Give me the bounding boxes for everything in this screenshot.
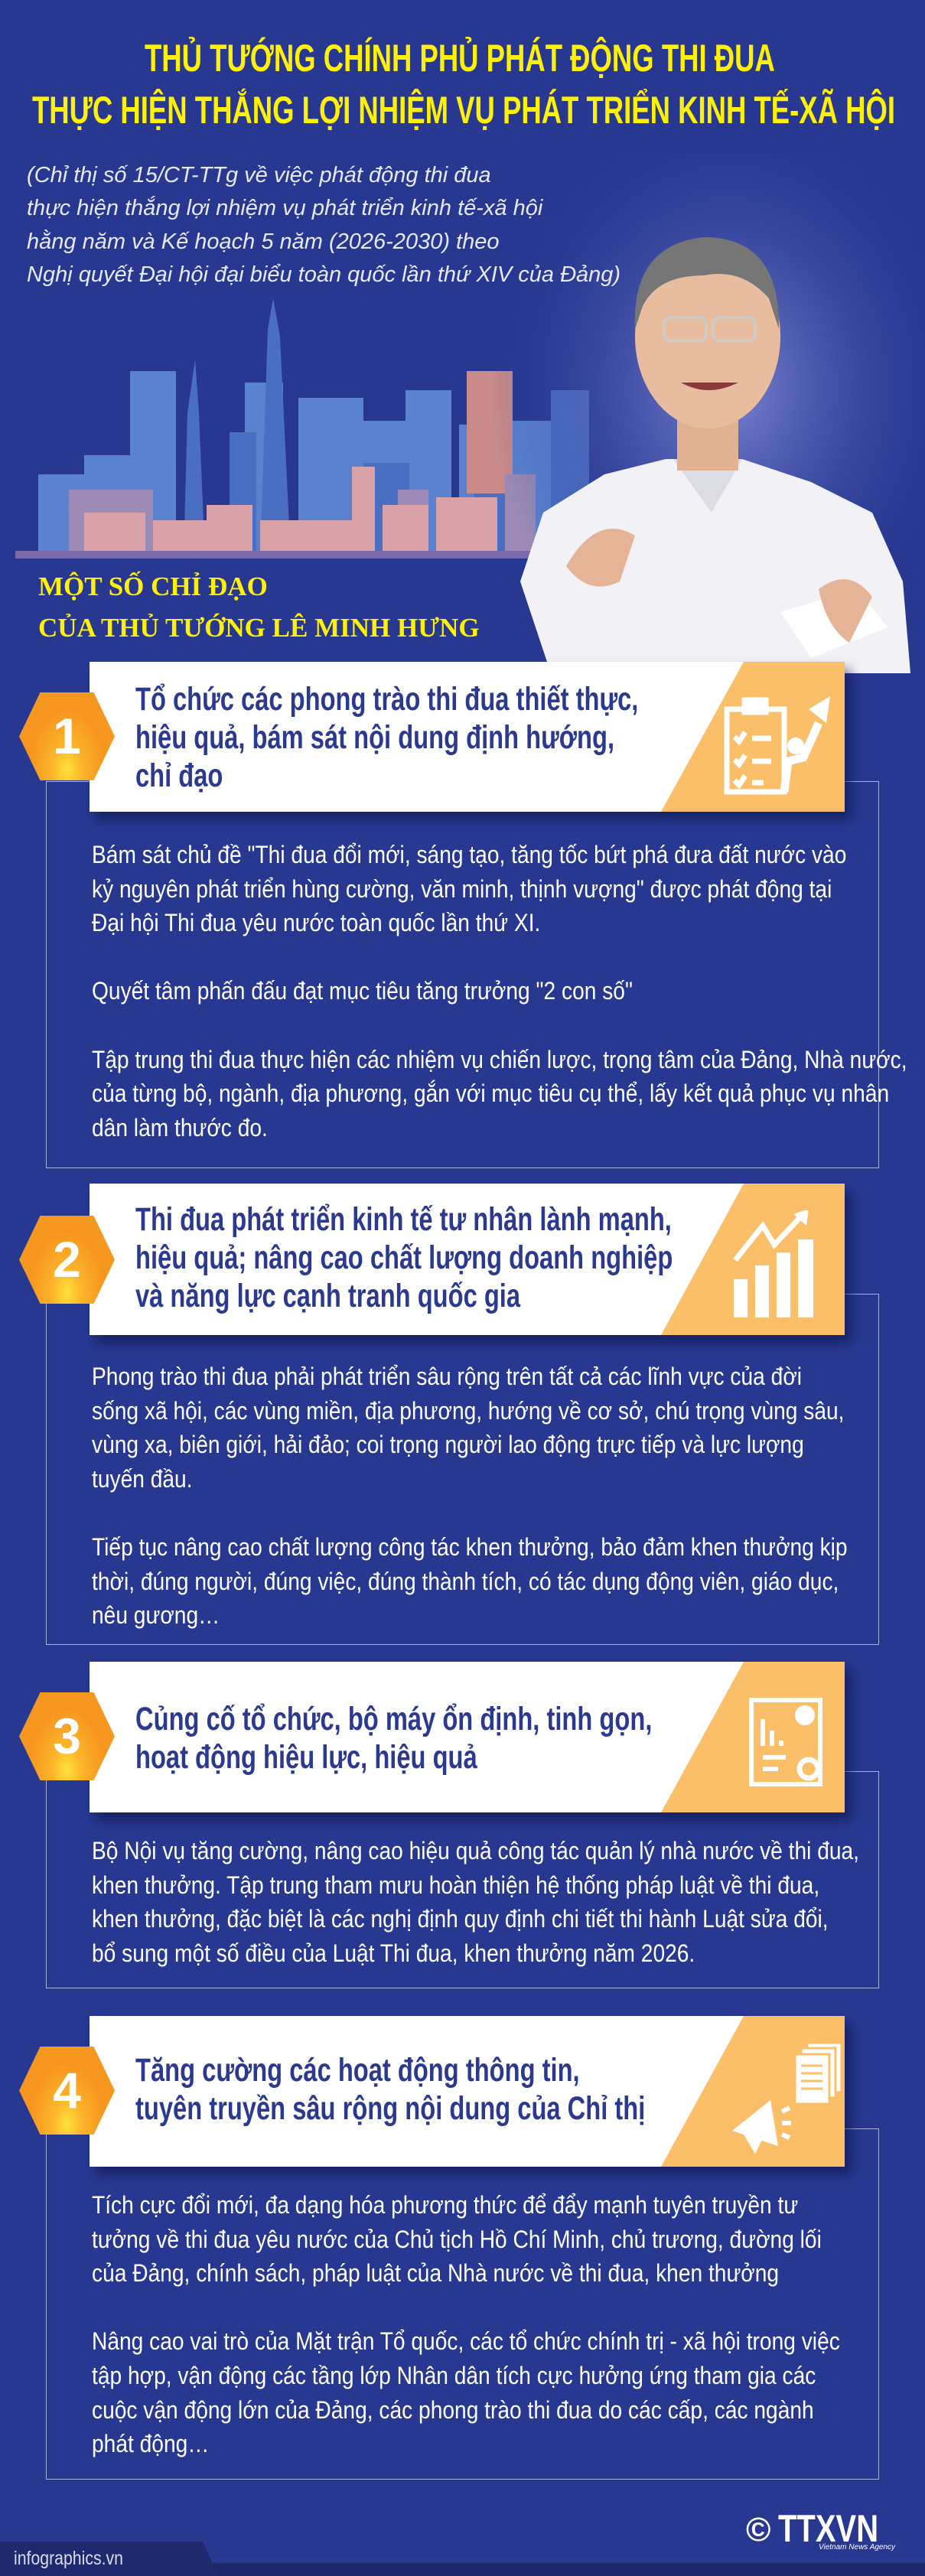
panel 1 header card (90, 662, 845, 812)
subtitle (27, 163, 620, 287)
subtitle: Nghị quyết Đại hội đại biểu toàn quốc lần thứ XIV của Đảng) (27, 262, 620, 287)
lead heading: CỦA THỦ TƯỚNG LÊ MINH HƯNG (38, 613, 480, 643)
icon: clipboard with arrow (724, 696, 830, 794)
title (32, 37, 895, 132)
hexagon badge 2 (19, 1216, 115, 1304)
panel 4 frame (46, 2128, 879, 2480)
panel 2 body text: thời, đúng người, đúng việc, đúng thành tích, có tác dụng động viên, giáo dục, (92, 1568, 839, 1595)
panel 1 body text: kỷ nguyên phát triển hùng cường, văn minh, thịnh vượng" được phát động tại (92, 875, 832, 903)
title: THỦ TƯỚNG CHÍNH PHỦ PHÁT ĐỘNG THI ĐUA (145, 37, 775, 80)
panel 4 body text: phát động… (92, 2430, 209, 2457)
icon: megaphone and documents (732, 2044, 840, 2154)
panel 2 heading: hiệu quả; nâng cao chất lượng doanh nghiệp (135, 1239, 673, 1276)
footer (0, 2542, 925, 2576)
panel 1 heading: Tổ chức các phong trào thi đua thiết thực, (135, 681, 638, 718)
panel 2 frame (46, 1294, 879, 1645)
illustration: portrait (502, 189, 910, 673)
panel 4 body text: tưởng về thi đua yêu nước của Chủ tịch Hồ Chí Minh, chủ trương, đường lối (92, 2226, 822, 2253)
panel 4 heading: tuyên truyền sâu rộng nội dung của Chỉ thị (135, 2090, 645, 2127)
icon: report with gear (749, 1698, 822, 1786)
panel 4 heading: Tăng cường các hoạt động thông tin, (135, 2052, 580, 2089)
panel 3 frame (46, 1771, 879, 1988)
panel 3 heading: hoạt động hiệu lực, hiệu quả (135, 1739, 477, 1776)
panel 4 body text: cuộc vận động lớn của Đảng, các phong trào thi đua do các cấp, các ngành (92, 2396, 814, 2424)
panel 1 heading (135, 681, 638, 794)
panel 4 body text: của Đảng, chính sách, pháp luật của Nhà nước về thi đua, khen thưởng (92, 2259, 779, 2287)
logo: TTXVN: TTXVN (778, 2507, 878, 2550)
title: THỰC HIỆN THẮNG LỢI NHIỆM VỤ PHÁT TRIỂN KINH TẾ-XÃ HỘI (32, 89, 895, 132)
panel 3 body text (92, 1837, 859, 1967)
panel 1 body text: Bám sát chủ đề "Thi đua đổi mới, sáng tạo, tăng tốc bứt phá đưa đất nước vào (92, 841, 846, 868)
panel 3 body text: bổ sung một số điều của Luật Thi đua, khen thưởng năm 2026. (92, 1939, 695, 1967)
panel 2 body text: tuyến đầu. (92, 1465, 193, 1493)
lead heading: MỘT SỐ CHỈ ĐẠO (38, 572, 268, 601)
hexagon badge 1: 1 (53, 708, 81, 764)
panel 3 header card (90, 1662, 845, 1812)
panel 1 body text: Quyết tâm phấn đấu đạt mục tiêu tăng trưởng "2 con số" (92, 977, 633, 1005)
hexagon badge 4: 4 (53, 2062, 81, 2118)
subtitle: hằng năm và Kế hoạch 5 năm (2026-2030) theo (27, 230, 499, 254)
subtitle: thực hiện thắng lợi nhiệm vụ phát triển kinh tế-xã hội (27, 196, 542, 220)
panel 4 body text: Nâng cao vai trò của Mặt trận Tổ quốc, các tổ chức chính trị - xã hội trong việc (92, 2327, 840, 2355)
lead heading (38, 571, 480, 643)
panel 2 body text: Tiếp tục nâng cao chất lượng công tác khen thưởng, bảo đảm khen thưởng kịp (92, 1533, 848, 1561)
panel 2 heading: Thi đua phát triển kinh tế tư nhân lành mạnh, (135, 1201, 672, 1238)
panel 4 body text (92, 2191, 840, 2457)
panel 4 body text: Tích cực đổi mới, đa dạng hóa phương thức để đẩy mạnh tuyên truyền tư (92, 2191, 798, 2219)
panel 1 heading: chỉ đạo (135, 757, 223, 794)
icon: growth chart (733, 1210, 813, 1317)
panel 1 body text: Tập trung thi đua thực hiện các nhiệm vụ chiến lược, trọng tâm của Đảng, Nhà nước, (92, 1046, 907, 1073)
panel 1 body text (92, 841, 907, 1141)
panel 2 heading (135, 1201, 673, 1314)
panel 3 heading (135, 1701, 652, 1776)
panel 3 body text: khen thưởng, đặc biệt là các nghị định quy định chi tiết thi hành Luật sửa đổi, (92, 1905, 829, 1933)
panel 2 body text: vùng xa, biên giới, hải đảo; coi trọng người lao động trực tiếp và lực lượng (92, 1431, 804, 1458)
logo: TTXVN: Vietnam News Agency (819, 2543, 895, 2552)
hexagon badge 1 (19, 692, 115, 780)
hexagon badge 4 (19, 2047, 115, 2135)
panel 3 heading: Củng cố tổ chức, bộ máy ổn định, tinh gọn, (135, 1701, 652, 1737)
subtitle: (Chỉ thị số 15/CT-TTg về việc phát động thi đua (27, 163, 491, 187)
panel 1 body text: Đại hội Thi đua yêu nước toàn quốc lần thứ XI. (92, 909, 540, 936)
logo: TTXVN (746, 2507, 895, 2552)
panel 2 body text (92, 1363, 848, 1629)
panel 3 body text: Bộ Nội vụ tăng cường, nâng cao hiệu quả công tác quản lý nhà nước về thi đua, (92, 1837, 859, 1864)
panel 4 heading (135, 2052, 645, 2127)
panel 2 header card (90, 1184, 845, 1335)
hexagon badge 3 (19, 1692, 115, 1780)
hexagon badge 2: 2 (53, 1231, 81, 1288)
panel 1 frame (46, 781, 879, 1168)
panel 3 body text: khen thưởng. Tập trung tham mưu hoàn thiện hệ thống pháp luật về thi đua, (92, 1871, 819, 1899)
panel 2 heading: và năng lực cạnh tranh quốc gia (135, 1278, 520, 1314)
panel 1 body text: của từng bộ, ngành, địa phương, gắn với mục tiêu cụ thể, lấy kết quả phục vụ nhân (92, 1080, 889, 1107)
logo: TTXVN: © (746, 2511, 770, 2548)
panel 2 body text: sống xã hội, các vùng miền, địa phương, hướng về cơ sở, chú trọng vùng sâu, (92, 1397, 845, 1425)
panel 2 body text: Phong trào thi đua phải phát triển sâu rộng trên tất cả các lĩnh vực của đời (92, 1363, 802, 1390)
illustration: city skyline (15, 298, 589, 559)
footer: infographics.vn (14, 2548, 123, 2569)
panel 1 heading: hiệu quả, bám sát nội dung định hướng, (135, 719, 614, 756)
panel 4 body text: tập hợp, vận động các tầng lớp Nhân dân tích cực hưởng ứng tham gia các (92, 2362, 816, 2389)
hexagon badge 3: 3 (53, 1708, 81, 1764)
panel 4 header card (90, 2016, 845, 2167)
panel 2 body text: nêu gương… (92, 1601, 220, 1629)
panel 1 body text: dân làm thước đo. (92, 1114, 268, 1141)
